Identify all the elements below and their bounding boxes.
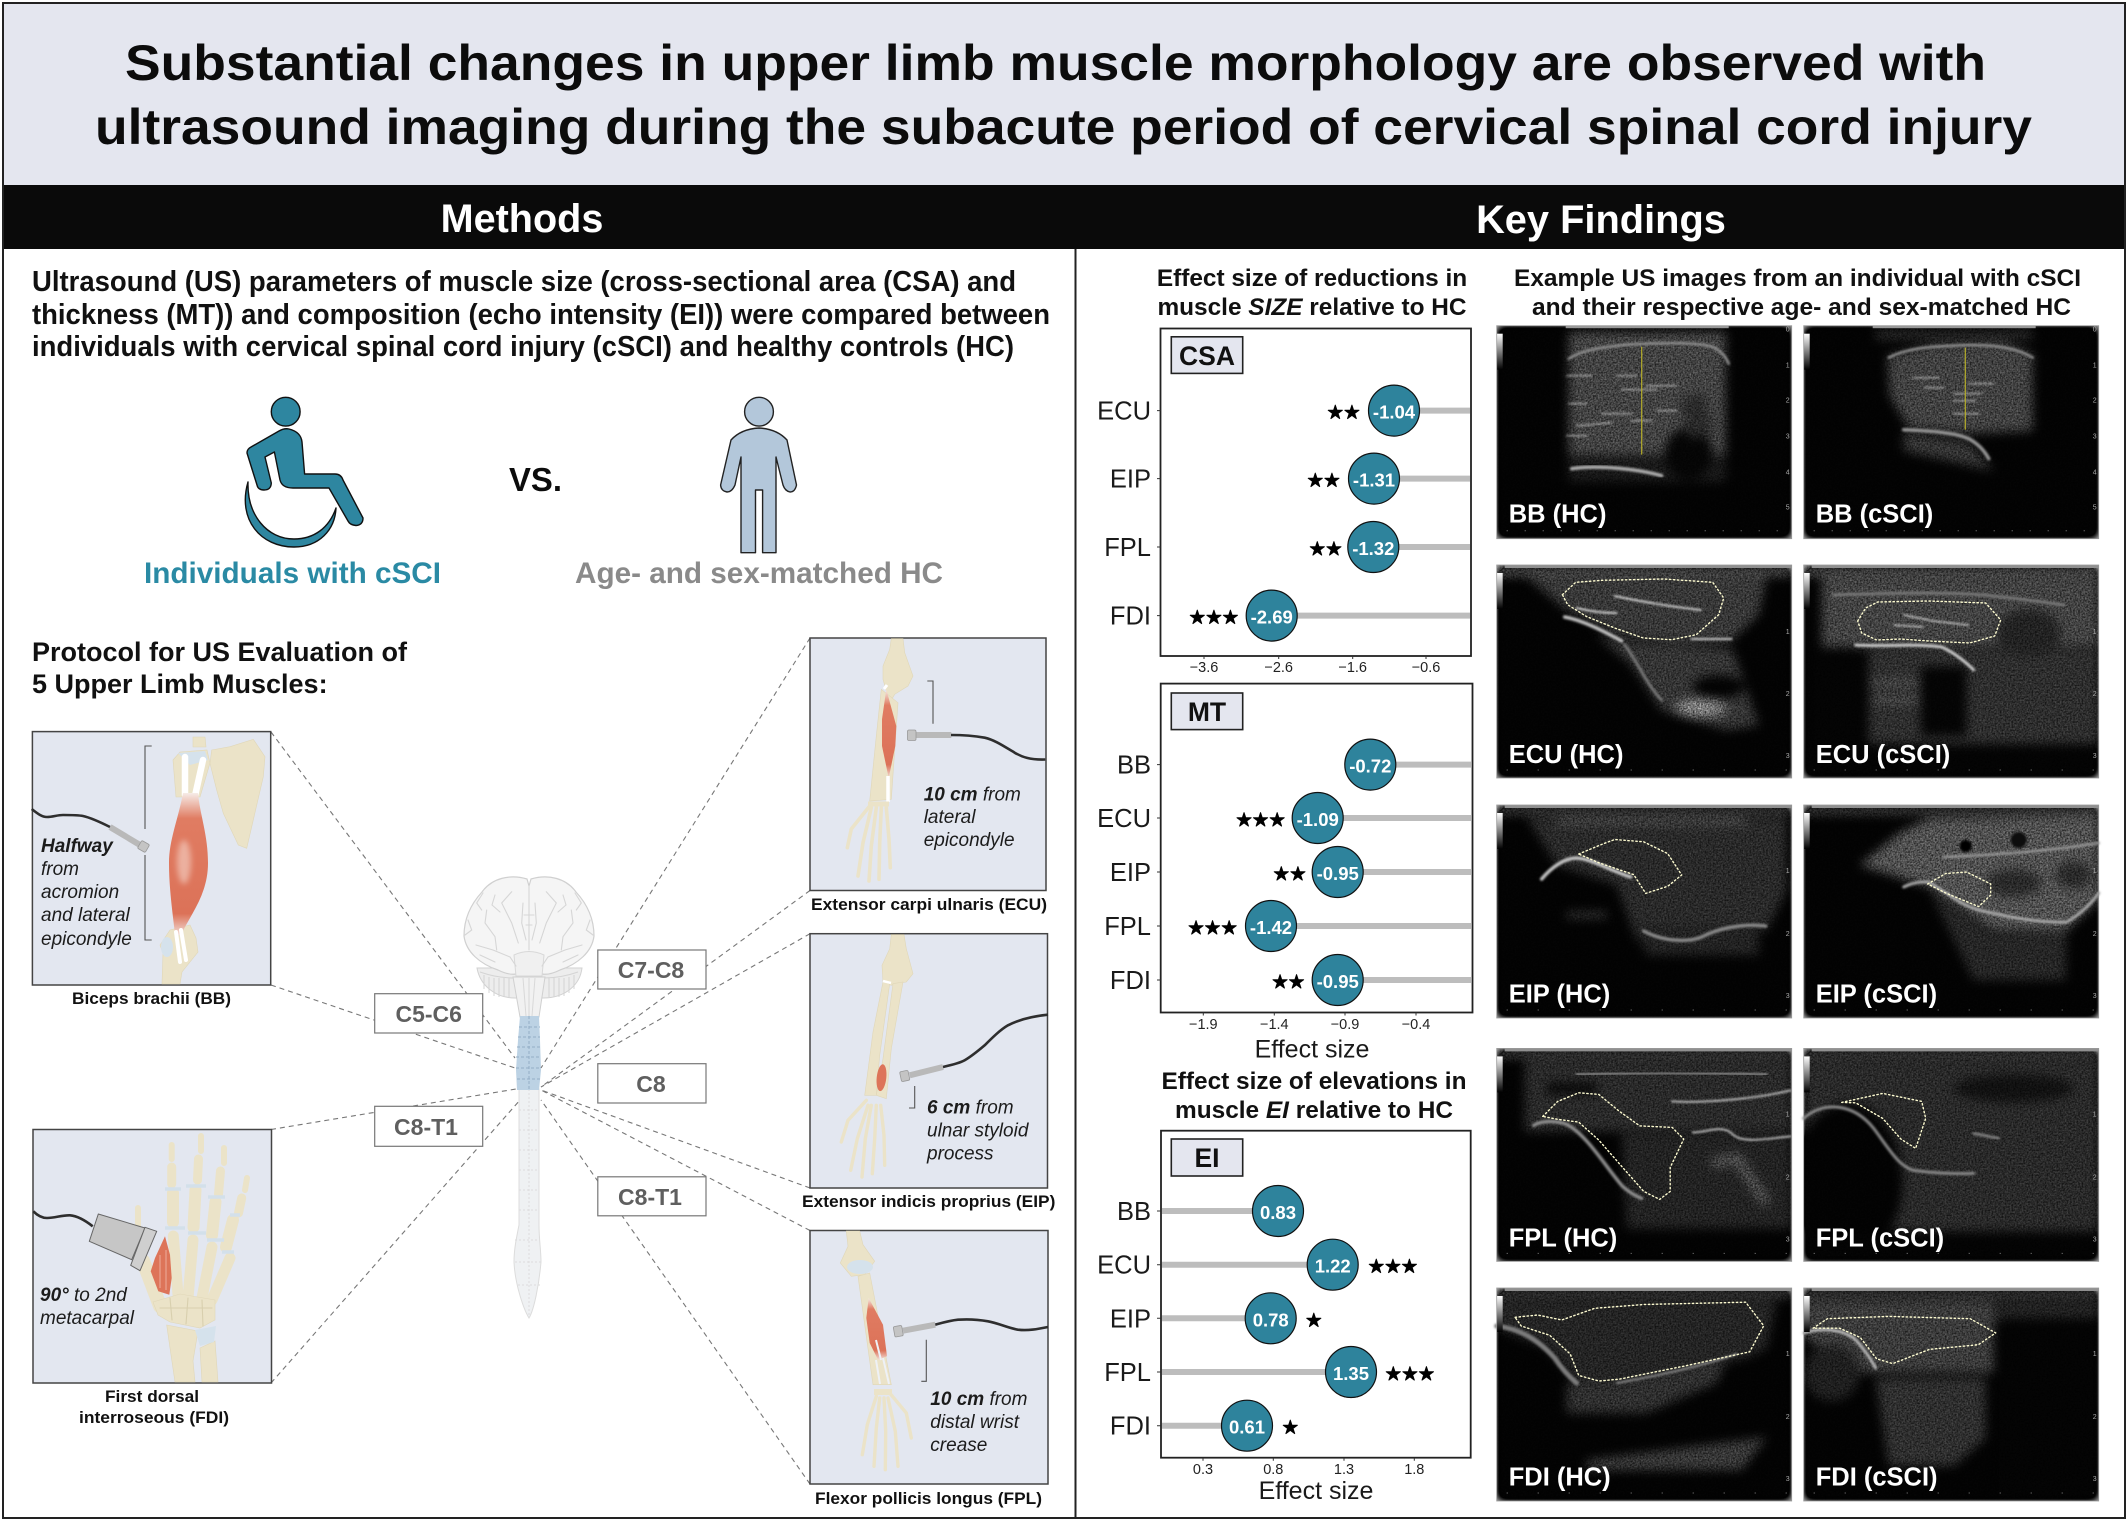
scale: 2 xyxy=(1786,1174,1790,1181)
dashed connector lines xyxy=(271,638,810,1484)
row BB xyxy=(1117,1186,1304,1236)
muscle outline xyxy=(1813,1316,1996,1364)
row EIP: ★★ xyxy=(1307,470,1340,492)
scale xyxy=(1786,1351,1790,1483)
row FPL xyxy=(1104,900,1471,952)
measurement note xyxy=(40,1285,135,1329)
panel divider xyxy=(1074,249,1076,1517)
scale: 3 xyxy=(2093,753,2097,760)
heading: size effect xyxy=(1157,265,1467,321)
level label: C7-C8 xyxy=(598,950,706,989)
caption: flexor pollicis longus: Flexor pollicis longus (FPL) xyxy=(815,1489,1042,1508)
level label: C8: C8 xyxy=(636,1071,666,1097)
scale xyxy=(2093,327,2097,512)
caption: first dorsal interosseous: interroseous (FDI) xyxy=(79,1408,229,1427)
x axis xyxy=(1193,1462,1424,1505)
row FPL xyxy=(1104,1346,1435,1398)
section header bar: Key Findings xyxy=(1476,198,1726,242)
label: CSA: CSA xyxy=(1179,341,1235,371)
scale: 2 xyxy=(1786,1414,1790,1421)
measurement note xyxy=(930,1389,1027,1456)
row ECU: ★★★ xyxy=(1368,1257,1418,1278)
ultrasound: BB cSCI xyxy=(1804,326,2099,539)
row ECU xyxy=(1097,1239,1418,1290)
methods intro text: Ultrasound (US) parameters of muscle size (cross-sectional area (CSA) and xyxy=(32,266,1016,298)
measurement note xyxy=(41,836,132,950)
scale: 1 xyxy=(2093,1111,2097,1118)
illustration: hand bones and FDI xyxy=(138,1136,247,1382)
scale: 1 xyxy=(2093,868,2097,875)
x axis: −1.4 xyxy=(1260,1017,1289,1033)
scale xyxy=(2093,1351,2097,1483)
measurement note: acromion xyxy=(41,882,119,903)
measurement note: epicondyle xyxy=(41,929,132,950)
ultrasound: EIP cSCI xyxy=(1804,805,2099,1018)
bracket and probe xyxy=(893,1319,1048,1381)
scale: 2 xyxy=(2093,398,2097,405)
ultrasound: EIP HC xyxy=(1497,805,1792,1018)
heading: example US images xyxy=(1514,265,2081,321)
panel: extensor carpi ulnaris xyxy=(810,638,1046,890)
x axis xyxy=(1189,1017,1430,1064)
measurement note: epicondyle xyxy=(924,830,1015,851)
left hemisphere sulci xyxy=(465,892,526,966)
x axis: Effect size xyxy=(1255,1036,1369,1064)
scale: 2 xyxy=(2093,931,2097,938)
row FDI: FDI xyxy=(1110,967,1151,995)
row ECU: -1.04 xyxy=(1373,402,1416,422)
scale: 5 xyxy=(2093,505,2097,512)
x axis: −0.6 xyxy=(1412,660,1440,676)
row BB: BB xyxy=(1117,752,1151,780)
row EIP: 0.78 xyxy=(1253,1309,1289,1330)
protocol heading: Protocol for US Evaluation of xyxy=(32,637,408,667)
scale: 1 xyxy=(2093,1351,2097,1358)
x axis: −0.4 xyxy=(1402,1017,1430,1033)
measurement note: and lateral xyxy=(41,905,131,926)
level label: C8-T1 (FDI) xyxy=(375,1106,483,1146)
x axis: −3.6 xyxy=(1190,660,1218,676)
row ECU: ★★★ xyxy=(1236,810,1285,831)
measurement note xyxy=(926,1098,1030,1164)
scale: 2 xyxy=(2093,1174,2097,1181)
muscle outline xyxy=(1858,601,2001,643)
heading: size effect: Effect size of reductions in xyxy=(1157,265,1467,292)
row ECU: ★★ xyxy=(1327,402,1360,424)
row FPL: -1.32 xyxy=(1352,538,1394,559)
section header bar: Methods xyxy=(441,197,603,241)
row FDI xyxy=(1110,590,1470,641)
group label: HC: Age- and sex-matched HC xyxy=(575,557,943,590)
measurement note: 10 cm from xyxy=(924,784,1021,806)
row FPL: ★★ xyxy=(1309,539,1342,560)
row EIP: ★ xyxy=(1306,1310,1322,1331)
chart: EI effect sizes xyxy=(1097,1131,1471,1505)
label: EI xyxy=(1171,1139,1243,1176)
caption: extensor carpi ulnaris: Extensor carpi ulnaris (ECU) xyxy=(811,895,1047,914)
x axis: −1.9 xyxy=(1189,1017,1218,1033)
icon: healthy control person xyxy=(721,397,796,553)
row FPL: FPL xyxy=(1104,913,1151,941)
row EIP: -1.31 xyxy=(1353,470,1395,490)
row FDI: FDI xyxy=(1110,602,1151,630)
ultrasound: FDI HC xyxy=(1497,1288,1792,1501)
ultrasound: ECU cSCI xyxy=(1804,565,2099,778)
measurement note: crease xyxy=(930,1435,987,1456)
measurement note: from xyxy=(41,859,79,880)
row ECU: -1.09 xyxy=(1297,809,1339,830)
measurement note: process xyxy=(926,1144,994,1164)
bracket and probe xyxy=(908,681,1045,760)
row EIP: EIP xyxy=(1110,859,1151,887)
row EIP: ★★ xyxy=(1273,864,1306,885)
ultrasound: FPL HC: FPL (HC) xyxy=(1509,1224,1617,1252)
row BB: -0.72 xyxy=(1349,756,1391,776)
row ECU xyxy=(1097,385,1470,436)
icon: wheelchair user xyxy=(245,397,363,547)
x axis xyxy=(1190,660,1440,676)
label: MT xyxy=(1171,693,1243,730)
level label: C5-C6: C5-C6 xyxy=(395,1001,462,1027)
row FDI: ★★ xyxy=(1272,972,1305,993)
row ECU: ECU xyxy=(1097,1252,1151,1280)
row FDI: ★ xyxy=(1282,1418,1299,1439)
scale: 3 xyxy=(2093,1236,2097,1243)
heading: example US images: and their respective age- and sex-matched HC xyxy=(1532,294,2071,321)
illustration: forearm bones and FPL xyxy=(840,1231,911,1470)
ultrasound: BB HC: BB (HC) xyxy=(1509,501,1606,529)
row FDI: ★★★ xyxy=(1189,608,1239,628)
methods intro text xyxy=(32,266,1050,363)
measurement note: Halfway xyxy=(41,836,114,857)
ultrasound: FPL cSCI xyxy=(1793,1048,2099,1261)
scale: 3 xyxy=(2093,434,2097,441)
illustration: forearm bones and ECU xyxy=(847,639,913,881)
ultrasound: EIP HC: EIP (HC) xyxy=(1509,980,1610,1008)
title banner xyxy=(4,4,2124,185)
scale: 2 xyxy=(2093,691,2097,698)
ultrasound: FDI HC: FDI (HC) xyxy=(1509,1464,1611,1492)
group label: cSCI: Individuals with cSCI xyxy=(144,557,441,590)
protocol heading: 5 Upper Limb Muscles: xyxy=(32,669,328,699)
scale: 2 xyxy=(1786,931,1790,938)
x axis: 0.8 xyxy=(1263,1462,1283,1478)
row FDI xyxy=(1110,1400,1299,1451)
x axis: −2.6 xyxy=(1264,660,1293,676)
muscle outline xyxy=(1842,1093,1926,1148)
row FPL: 1.35 xyxy=(1333,1363,1369,1384)
measurement note: ulnar styloid xyxy=(927,1120,1030,1142)
chart: MT effect sizes xyxy=(1097,684,1472,1064)
ultrasound: FPL HC xyxy=(1497,1048,1792,1261)
heading: size effect: muscle SIZE relative to HC xyxy=(1157,294,1467,321)
scale: 1 xyxy=(1786,1111,1790,1118)
scale: 5 xyxy=(1786,505,1790,512)
title banner: ultrasound imaging during the subacute period of cervical spinal cord injury xyxy=(95,99,2032,155)
scale: 3 xyxy=(1786,993,1790,1000)
bracket and probe xyxy=(32,746,152,940)
illustration: arm bones and biceps xyxy=(160,737,265,984)
vs label: VS. xyxy=(509,461,562,498)
protocol heading xyxy=(32,637,408,699)
x axis: Effect size xyxy=(1259,1477,1373,1505)
caption: extensor indicis proprius: Extensor indicis proprius (EIP) xyxy=(802,1192,1055,1211)
row EIP: EIP xyxy=(1110,1305,1151,1333)
scale xyxy=(2093,868,2097,1000)
scale: 3 xyxy=(2093,993,2097,1000)
measurement note: 6 cm from xyxy=(927,1098,1014,1118)
row FDI: -0.95 xyxy=(1317,971,1359,992)
title banner: Substantial changes in upper limb muscle morphology are observed with xyxy=(125,35,1986,91)
scale: 1 xyxy=(2093,629,2097,636)
muscle outline xyxy=(1515,1302,1764,1381)
caption: first dorsal interosseous xyxy=(79,1387,229,1427)
methods intro text: thickness (MT)) and composition (echo intensity (EI)) were compared between xyxy=(32,299,1050,331)
x axis: −1.6 xyxy=(1338,660,1367,676)
section header bar xyxy=(4,185,2124,249)
scale xyxy=(1786,629,1790,760)
row BB: BB xyxy=(1117,1198,1151,1226)
row FDI xyxy=(1110,954,1471,1006)
caption: first dorsal interosseous: First dorsal xyxy=(105,1387,199,1406)
scale: 2 xyxy=(2093,1414,2097,1421)
x axis: 1.8 xyxy=(1404,1462,1424,1478)
methods intro text: individuals with cervical spinal cord injury (cSCI) and healthy controls (HC) xyxy=(32,331,1014,363)
heading: example US images: Example US images from an individual with cSCI xyxy=(1514,265,2081,292)
label: CSA xyxy=(1171,337,1243,373)
measurement note: 10 cm from xyxy=(930,1389,1027,1410)
measurement note: lateral xyxy=(924,807,976,828)
row FPL: FPL xyxy=(1104,534,1151,562)
row FPL: FPL xyxy=(1104,1359,1151,1387)
illustration: brain and spinal cord xyxy=(464,877,594,1318)
measurement note: 90° to 2nd xyxy=(40,1285,128,1306)
row FPL: ★★★ xyxy=(1385,1364,1435,1385)
ultrasound probe xyxy=(33,1211,157,1271)
x axis: 1.3 xyxy=(1334,1462,1354,1478)
ultrasound: FDI cSCI: FDI (cSCI) xyxy=(1816,1464,1938,1492)
measurement note xyxy=(924,784,1021,851)
ultrasound: EIP cSCI: EIP (cSCI) xyxy=(1816,980,1937,1008)
x axis: 0.3 xyxy=(1193,1462,1213,1478)
row BB xyxy=(1117,739,1471,790)
scale xyxy=(1786,327,1790,512)
scale: 1 xyxy=(2093,363,2097,370)
level label: C8-T1 (FPL): C8-T1 xyxy=(618,1184,682,1210)
row BB: 0.83 xyxy=(1260,1202,1296,1223)
scale: 3 xyxy=(1786,1476,1790,1483)
panel: biceps brachii xyxy=(32,732,271,985)
measurement note: metacarpal xyxy=(40,1308,135,1329)
scale: 1 xyxy=(1786,868,1790,875)
row ECU: ECU xyxy=(1097,398,1151,426)
row EIP xyxy=(1110,1293,1322,1344)
scale xyxy=(1786,1111,1790,1243)
ultrasound: ECU cSCI: ECU (cSCI) xyxy=(1816,741,1950,769)
label: MT: MT xyxy=(1188,697,1226,727)
panel: first dorsal interosseous xyxy=(33,1130,272,1383)
scale: 3 xyxy=(1786,1236,1790,1243)
scale: 0 xyxy=(2093,327,2097,334)
chart: CSA effect sizes xyxy=(1097,328,1471,676)
ultrasound: FDI cSCI xyxy=(1804,1288,2099,1501)
x axis: −0.9 xyxy=(1331,1017,1359,1033)
row FDI: FDI xyxy=(1110,1413,1151,1441)
level label: C5-C6 xyxy=(375,994,483,1033)
ultrasound: FPL cSCI: FPL (cSCI) xyxy=(1816,1224,1944,1252)
muscle outline xyxy=(1543,1093,1684,1199)
row FPL xyxy=(1104,522,1470,572)
ultrasound: BB HC xyxy=(1497,326,1792,539)
scale xyxy=(2093,629,2097,760)
level label: C8 xyxy=(598,1064,706,1103)
scale: 2 xyxy=(1786,398,1790,405)
heading: EI effect: muscle EI relative to HC xyxy=(1175,1097,1453,1124)
panel: extensor indicis proprius xyxy=(810,934,1048,1188)
row FPL: ★★★ xyxy=(1188,918,1237,939)
measurement note: distal wrist xyxy=(930,1412,1020,1433)
ultrasound: ECU HC: ECU (HC) xyxy=(1509,741,1623,769)
scale xyxy=(1786,868,1790,1000)
muscle outline xyxy=(1562,579,1724,640)
row FDI: 0.61 xyxy=(1229,1417,1265,1438)
scale: 3 xyxy=(2093,1476,2097,1483)
muscle outline xyxy=(1579,840,1682,893)
level label: C7-C8: C7-C8 xyxy=(618,957,684,983)
heading: EI effect xyxy=(1162,1068,1466,1124)
row EIP: -0.95 xyxy=(1317,863,1359,884)
right hemisphere sulci xyxy=(532,892,593,966)
row EIP xyxy=(1110,846,1471,898)
scale: 3 xyxy=(1786,753,1790,760)
row ECU: 1.22 xyxy=(1315,1256,1351,1277)
row ECU xyxy=(1097,792,1471,844)
muscle outline xyxy=(1928,872,1991,907)
scale: 4 xyxy=(2093,470,2097,477)
scale xyxy=(2093,1111,2097,1243)
panel: flexor pollicis longus xyxy=(810,1230,1048,1484)
row FPL: -1.42 xyxy=(1250,917,1292,938)
heading: EI effect: Effect size of elevations in xyxy=(1162,1068,1466,1095)
row EIP: EIP xyxy=(1110,466,1151,494)
scale: 0 xyxy=(1786,327,1790,334)
bracket and probe xyxy=(900,1015,1048,1108)
ultrasound: BB cSCI: BB (cSCI) xyxy=(1816,501,1933,529)
scale: 1 xyxy=(1786,363,1790,370)
scale: 1 xyxy=(1786,629,1790,636)
row ECU: ECU xyxy=(1097,805,1151,833)
level label: C8-T1 (FPL) xyxy=(598,1177,706,1216)
ultrasound: ECU HC xyxy=(1497,565,1792,778)
scale: 1 xyxy=(1786,1351,1790,1358)
row EIP xyxy=(1110,453,1470,504)
level label: C8-T1 (FDI): C8-T1 xyxy=(394,1114,458,1140)
scale: 2 xyxy=(1786,691,1790,698)
row FDI: -2.69 xyxy=(1251,606,1293,628)
scale: 4 xyxy=(1786,470,1790,477)
label: EI: EI xyxy=(1194,1143,1220,1173)
scale: 3 xyxy=(1786,434,1790,441)
illustration: forearm bones and EIP xyxy=(841,935,913,1177)
caption: biceps brachii: Biceps brachii (BB) xyxy=(72,989,231,1008)
